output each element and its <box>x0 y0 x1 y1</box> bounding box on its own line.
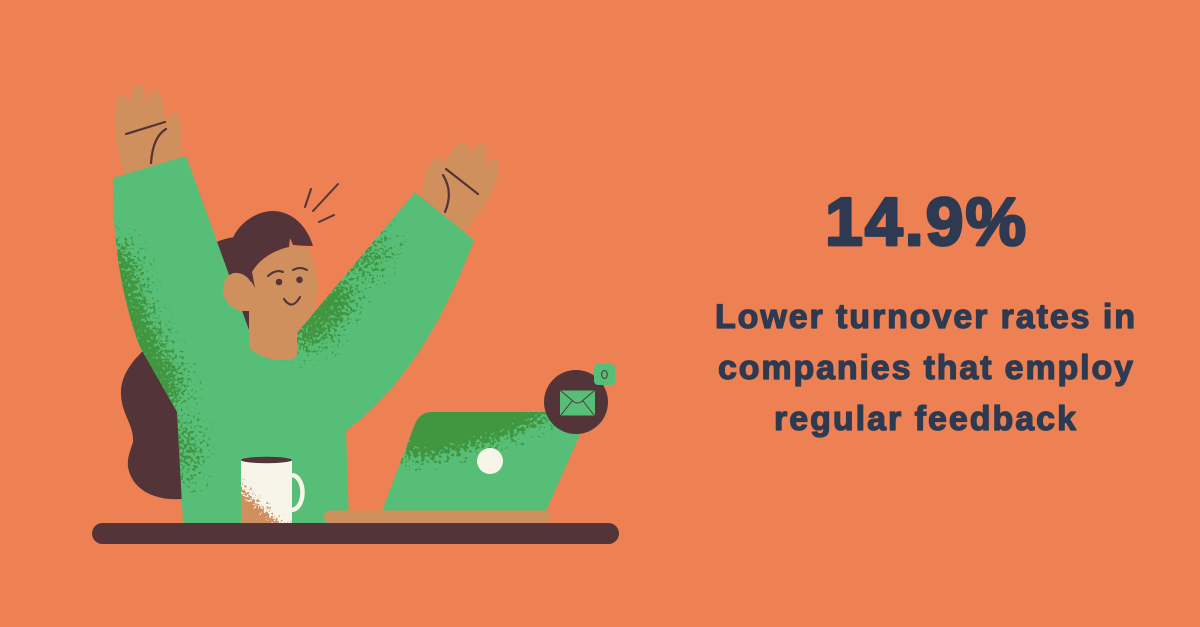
laptop logo <box>477 448 503 474</box>
sweater grain shading <box>108 236 386 478</box>
description text: Lower turnover rates in <box>715 298 1135 336</box>
laptop grain <box>400 412 555 476</box>
right hand <box>422 142 498 232</box>
green sweater <box>108 156 474 523</box>
infographic canvas <box>92 84 1134 544</box>
coffee <box>241 457 292 463</box>
mug grain <box>241 478 292 523</box>
ear <box>223 273 254 311</box>
statistic: 14.9%: 14.9% <box>825 184 1026 260</box>
long hair behind body <box>121 351 190 499</box>
description text: companies that employ <box>718 349 1133 387</box>
envelope <box>560 390 595 416</box>
email notification icon <box>544 364 615 434</box>
neck and face <box>223 211 317 360</box>
desk <box>92 523 619 544</box>
hair behind head <box>215 237 262 335</box>
notification badge <box>594 364 615 385</box>
excitement lines <box>305 184 338 222</box>
left hand <box>115 84 182 175</box>
front hair <box>233 211 313 288</box>
illustration: woman celebrating at desk <box>92 84 619 544</box>
palm lines <box>126 122 166 163</box>
eyes <box>276 279 282 285</box>
eyebrows and smile <box>268 268 307 305</box>
palm lines <box>443 169 478 212</box>
laptop <box>324 412 580 523</box>
description text: regular feedback <box>774 400 1076 438</box>
description text <box>715 298 1135 438</box>
coffee mug <box>241 456 305 523</box>
laptop base <box>324 510 551 523</box>
